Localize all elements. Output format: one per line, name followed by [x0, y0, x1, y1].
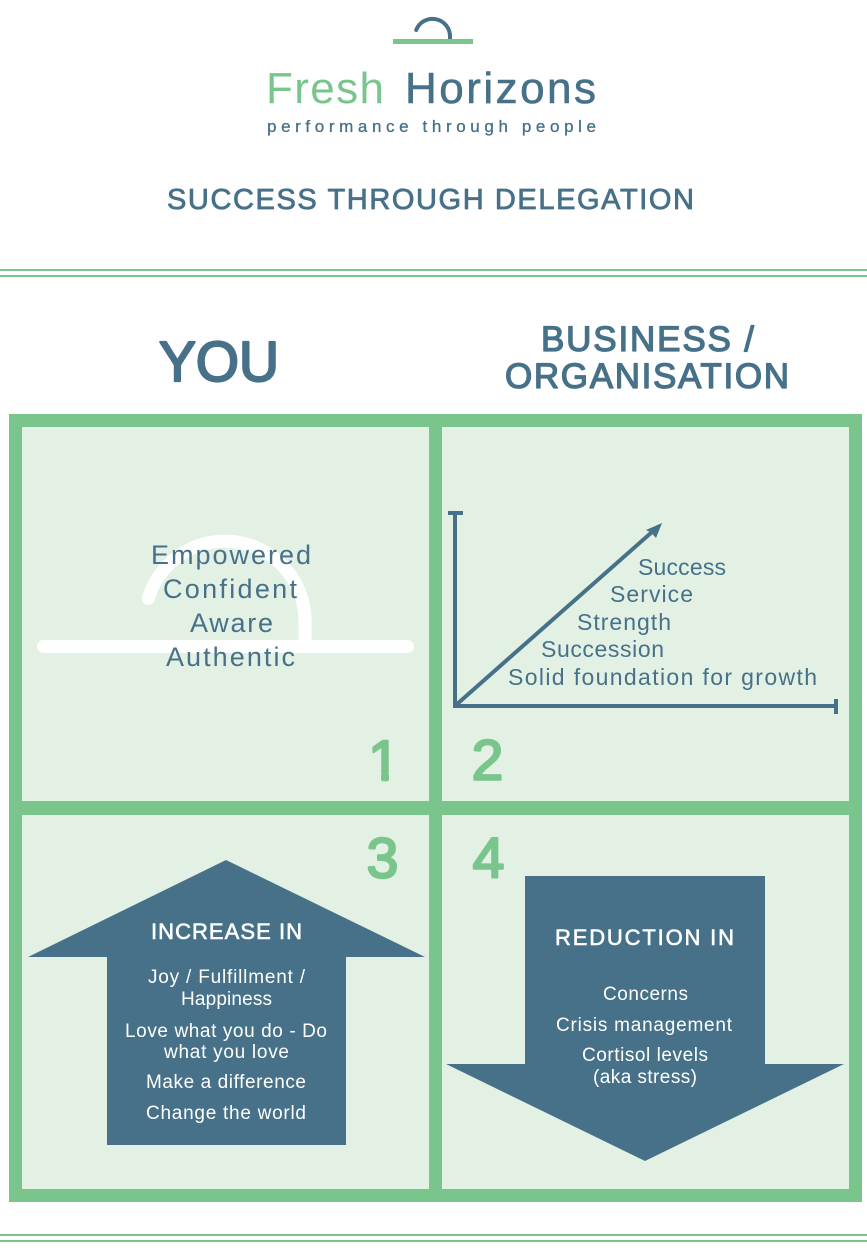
title: SUCCESS THROUGH DELEGATION	[167, 184, 694, 216]
text: qualities list: Confident	[163, 574, 297, 604]
text: increase list	[125, 967, 327, 1124]
quadrant frame	[9, 414, 862, 1202]
panel 4: reduction in	[442, 815, 849, 1189]
chart axes	[448, 511, 838, 714]
logo word: Horizons: Horizons	[405, 64, 596, 113]
text: increase list: Happiness	[181, 989, 272, 1010]
text: growth list: Success	[638, 554, 726, 580]
text: reduction list: (aka stress)	[593, 1067, 697, 1088]
text: qualities list: Authentic	[166, 642, 295, 672]
text: increase list: what you love	[163, 1042, 289, 1063]
heading: business / organisation: ORGANISATION	[505, 357, 789, 396]
text: increase list: Make a difference	[146, 1072, 306, 1093]
heading: increase in: INCREASE IN	[151, 919, 302, 944]
arrow: growth	[456, 523, 662, 705]
text: growth list: Succession	[541, 636, 664, 662]
heading: reduction in: REDUCTION IN	[555, 925, 734, 950]
heading: business / organisation	[505, 320, 789, 396]
heading: you: YOU	[159, 330, 279, 394]
number 2: 2	[472, 728, 503, 792]
text: qualities list: Empowered	[151, 540, 311, 570]
text: reduction list	[556, 984, 733, 1088]
text: qualities list	[151, 540, 311, 672]
text: increase list: Change the world	[146, 1103, 306, 1124]
text: increase list: Joy / Fulfillment /	[148, 967, 306, 988]
text: growth list: Strength	[577, 609, 671, 635]
number 1: 1	[368, 729, 400, 793]
panel 3: increase in	[22, 815, 429, 1189]
arrow: down	[446, 876, 844, 1161]
heading: business / organisation: BUSINESS /	[541, 320, 754, 359]
text: reduction list: Crisis management	[556, 1015, 733, 1036]
icon: white horizon watermark	[37, 541, 414, 653]
text: growth list: Solid foundation for growth	[508, 664, 817, 690]
text: reduction list: Concerns	[603, 984, 688, 1005]
text: growth list	[508, 554, 817, 690]
text: increase list: Love what you do - Do	[125, 1021, 327, 1042]
panel 2: business growth chart	[442, 427, 849, 801]
logo word: Fresh: Fresh	[266, 64, 384, 113]
number 3: 3	[367, 826, 398, 890]
text: qualities list: Aware	[190, 608, 273, 638]
text: growth list: Service	[610, 581, 693, 607]
arrow: up	[28, 860, 425, 1145]
text: reduction list: Cortisol levels	[582, 1045, 708, 1066]
panel 1: you, empowered	[22, 427, 429, 801]
icon: horizon bar	[393, 39, 473, 44]
logo	[266, 19, 596, 136]
logo tagline: performance through people	[267, 117, 596, 136]
icon: horizon arc	[416, 19, 450, 40]
number 4: 4	[473, 826, 504, 890]
